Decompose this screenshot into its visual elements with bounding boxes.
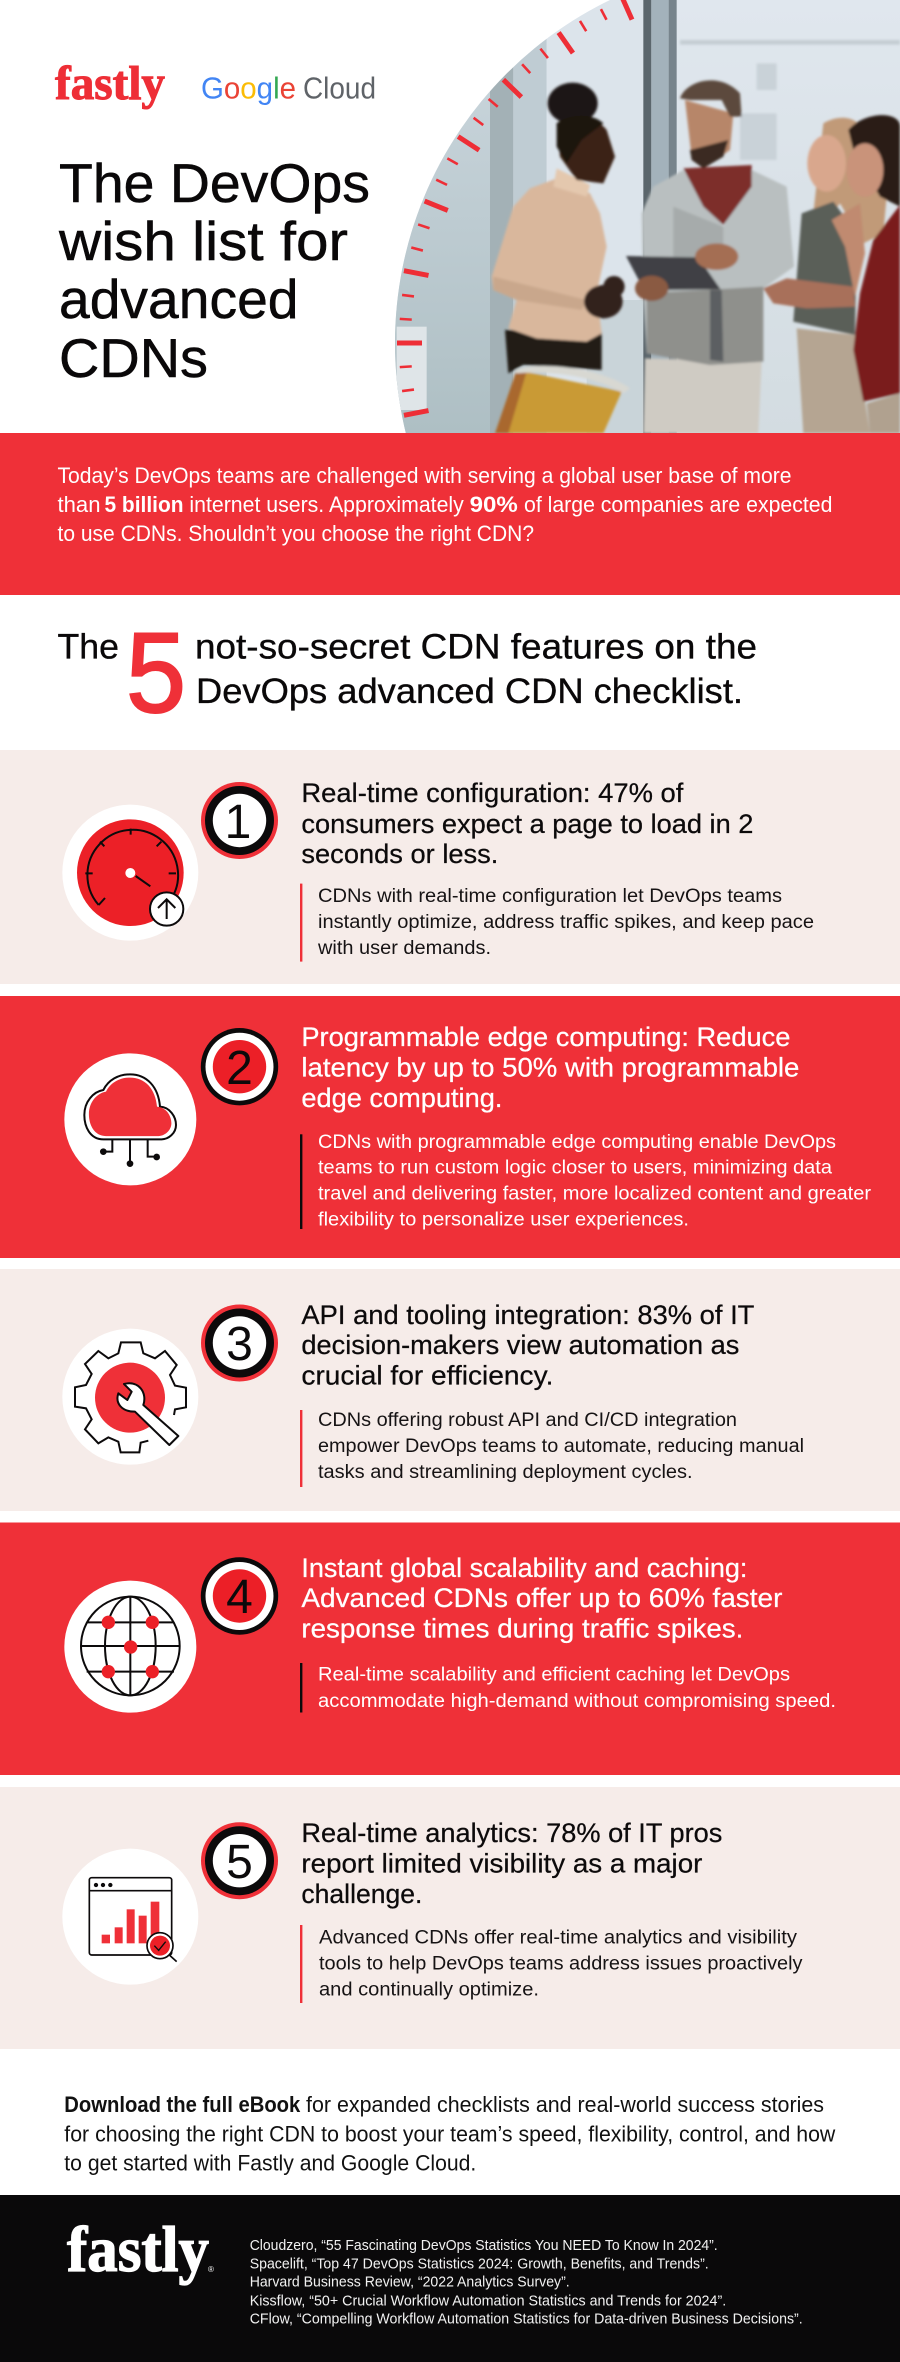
intro text: of large companies are expected — [524, 492, 832, 517]
number badge 2 — [201, 1028, 278, 1105]
call to action text: for expanded checklists and real-world success stories — [306, 2092, 824, 2117]
feature 3 body: CDNs offering robust API and CI/CD integration — [318, 1410, 737, 1431]
call to action text: for choosing the right CDN to boost your team’s speed, flexibility, control, and how — [64, 2121, 835, 2146]
feature 1 heading: seconds or less. — [301, 839, 498, 869]
panel: intro band — [0, 433, 900, 595]
heading: the 5 features — [58, 610, 757, 737]
feature 4 body: Real-time scalability and efficient caching let DevOps — [318, 1665, 790, 1686]
feature 2 heading: latency by up to 50% with programmable — [301, 1052, 799, 1082]
panel: feature 3 API and tooling integration — [0, 1269, 900, 1511]
big red 5: 5 — [126, 610, 186, 737]
intro text: 5 billion — [104, 492, 184, 517]
logo: Google Cloud: Cloud — [303, 71, 376, 106]
call to action text: Download the full eBook — [64, 2092, 301, 2117]
feature 2 body: flexibility to personalize user experiences. — [318, 1210, 689, 1231]
icon: cloud with connectors — [64, 1053, 196, 1185]
feature 5 heading: challenge. — [301, 1879, 422, 1909]
hero photo: team of four around a tablet — [383, 0, 900, 433]
heading: the 5 features: not-so-secret CDN features on the — [195, 628, 757, 667]
title — [58, 152, 370, 389]
feature 3 body: empower DevOps teams to automate, reducing manual — [318, 1436, 804, 1457]
panel: feature 5 real-time analytics — [0, 1787, 900, 2049]
feature 2 body: teams to run custom logic closer to users, minimizing data — [318, 1158, 832, 1179]
title: advanced — [59, 268, 298, 330]
logo: Google Cloud — [201, 71, 376, 106]
feature 4 body — [300, 1663, 836, 1712]
feature 4 heading: Instant global scalability and caching: — [301, 1553, 747, 1583]
feature 5 heading — [301, 1818, 722, 1909]
number badge 1: 1 — [225, 796, 251, 849]
heading: the 5 features: The — [58, 628, 119, 667]
feature 3 body — [300, 1410, 804, 1487]
person 1 — [505, 330, 602, 373]
logo: fastly: fastly — [55, 57, 165, 110]
feature 4 heading: Advanced CDNs offer up to 60% faster — [301, 1583, 783, 1613]
feature 2 body — [300, 1132, 872, 1231]
feature 1 body: instantly optimize, address traffic spikes, and keep pace — [318, 912, 814, 933]
title: wish list for — [58, 210, 348, 272]
title: CDNs — [59, 327, 208, 389]
logo: fastly white: ® — [208, 2265, 214, 2274]
panel: feature 2 programmable edge computing — [0, 996, 900, 1258]
feature 3 body: tasks and streamlining deployment cycles. — [318, 1462, 693, 1483]
feature 4 heading: response times during traffic spikes. — [301, 1614, 743, 1644]
icon: analytics window — [62, 1849, 198, 1985]
panel: footer — [0, 2195, 900, 2362]
title: The DevOps — [59, 152, 370, 214]
call to action text — [64, 2092, 835, 2176]
source references: Spacelift, “Top 47 DevOps Statistics 2024: Growth, Benefits, and Trends”. — [250, 2255, 709, 2272]
feature 4 body: accommodate high-demand without compromising speed. — [318, 1691, 836, 1712]
number badge 1 — [201, 782, 278, 859]
intro text — [58, 463, 832, 546]
number badge 2: 2 — [226, 1042, 253, 1095]
panel: feature 4 instant global scalability — [0, 1522, 900, 1775]
number badge 4: 4 — [226, 1571, 253, 1624]
source references: Cloudzero, “55 Fascinating DevOps Statistics You NEED To Know In 2024”. — [250, 2237, 718, 2254]
number badge 5 — [201, 1822, 278, 1899]
feature 2 heading: edge computing. — [301, 1083, 502, 1113]
feature 1 body: with user demands. — [317, 938, 491, 959]
feature 1 body: CDNs with real-time configuration let DevOps teams — [318, 886, 782, 907]
icon: speed gauge — [62, 805, 198, 941]
icon: gear and wrench — [62, 1329, 198, 1465]
source references: Harvard Business Review, “2022 Analytics Survey”. — [250, 2274, 570, 2291]
feature 2 body: travel and delivering faster, more localized content and greater — [318, 1184, 872, 1205]
intro text: Today’s DevOps teams are challenged with serving a global user base of more — [58, 463, 792, 488]
feature 1 heading — [301, 778, 753, 869]
feature 2 heading: Programmable edge computing: Reduce — [301, 1022, 790, 1052]
feature 5 body — [300, 1925, 803, 2003]
source references — [250, 2237, 803, 2328]
source references: CFlow, “Compelling Workflow Automation Statistics for Data-driven Business Decisions”. — [250, 2311, 803, 2328]
call to action text: to get started with Fastly and Google Cloud. — [64, 2151, 476, 2176]
feature 5 heading: Real-time analytics: 78% of IT pros — [301, 1818, 722, 1848]
feature 1 heading: consumers expect a page to load in 2 — [301, 809, 753, 839]
person 3 — [810, 118, 887, 243]
feature 3 heading: API and tooling integration: 83% of IT — [301, 1300, 754, 1330]
feature 2 heading — [301, 1022, 799, 1113]
logo: Google Cloud: Google — [201, 71, 296, 106]
feature 5 heading: report limited visibility as a major — [301, 1848, 703, 1878]
feature 5 body: Advanced CDNs offer real-time analytics and visibility — [319, 1928, 798, 1949]
intro text: internet users. Approximately — [189, 492, 464, 517]
feature 1 heading: Real-time configuration: 47% of — [301, 778, 684, 808]
feature 3 heading: crucial for efficiency. — [301, 1361, 553, 1391]
source references: Kissflow, “50+ Crucial Workflow Automation Statistics and Trends for 2024”. — [250, 2292, 726, 2309]
yellow chair — [506, 371, 622, 433]
intro text: than — [58, 492, 100, 517]
number badge 5: 5 — [226, 1836, 253, 1889]
number badge 4 — [201, 1557, 278, 1635]
number badge 3: 3 — [226, 1318, 253, 1371]
logo: fastly white: fastly — [67, 2214, 209, 2286]
person 2 — [643, 358, 762, 433]
intro text: to use CDNs. Shouldn’t you choose the right CDN? — [58, 521, 534, 546]
number badge 3 — [201, 1304, 278, 1382]
gauge tick marks along the photo arc — [397, 0, 632, 415]
feature 5 body: tools to help DevOps teams address issues proactively — [319, 1954, 803, 1975]
feature 3 heading: decision-makers view automation as — [301, 1330, 739, 1360]
heading: the 5 features: DevOps advanced CDN checklist. — [196, 672, 743, 711]
panel: feature 1 real-time configuration — [0, 750, 900, 984]
feature 4 heading — [301, 1553, 783, 1644]
feature 2 body: CDNs with programmable edge computing enable DevOps — [318, 1132, 836, 1153]
feature 1 body — [300, 884, 814, 962]
intro text: 90% — [470, 492, 518, 517]
person 4 — [848, 115, 900, 207]
feature 3 heading — [301, 1300, 754, 1391]
feature 5 body: and continually optimize. — [319, 1980, 539, 2001]
icon: globe with nodes — [64, 1581, 196, 1713]
